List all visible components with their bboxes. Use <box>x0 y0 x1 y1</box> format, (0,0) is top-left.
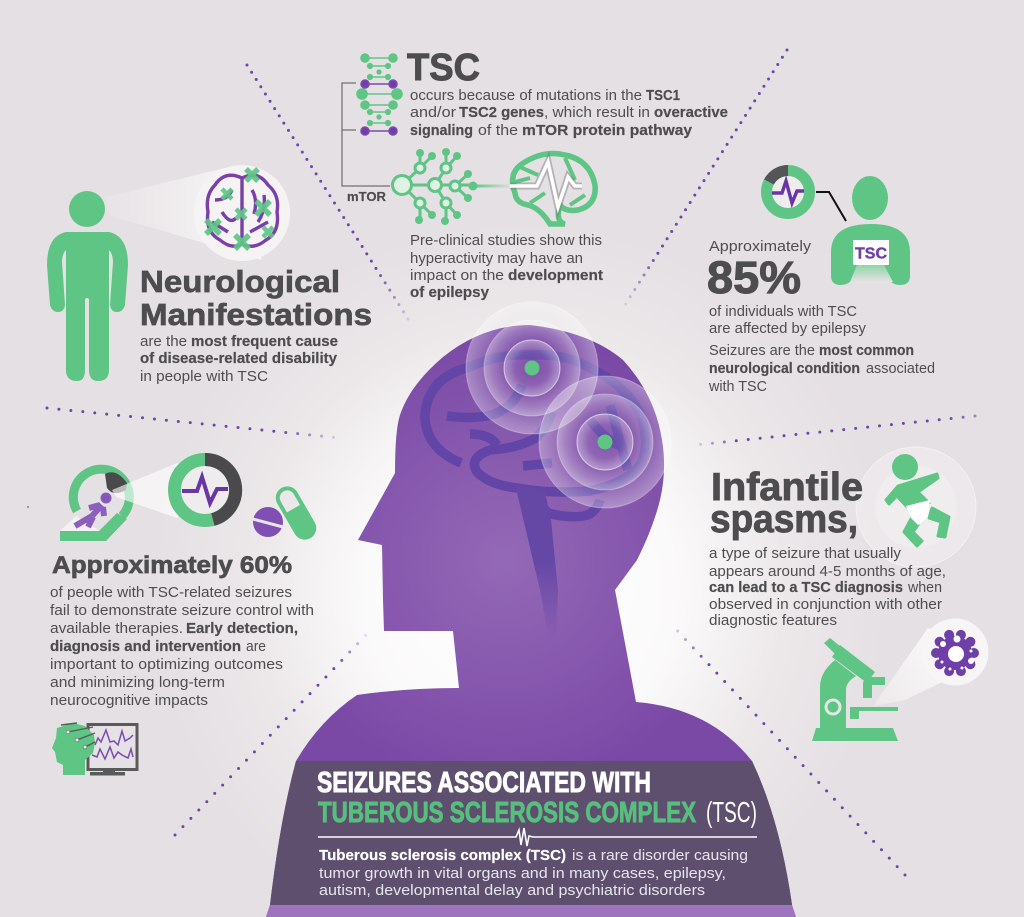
icon: EEG monitor and head <box>52 723 137 776</box>
banner title <box>317 767 757 829</box>
neurological text: are the <box>140 334 187 350</box>
neurological text: of disease-related disability <box>140 351 337 367</box>
neurological heading: Manifestations <box>140 297 372 332</box>
60% text: neurocognitive impacts <box>50 692 208 709</box>
icon: 85% donut with pulse <box>766 170 810 214</box>
icon: green brain with pulse <box>510 154 595 224</box>
banner description: autism, developmental delay and psychiatric disorders <box>319 883 705 899</box>
icon: mTOR pathway network <box>392 148 509 225</box>
icon: pill and capsule <box>253 482 320 544</box>
TSC description: signaling <box>410 123 473 139</box>
banner description <box>319 848 748 899</box>
central head silhouette with brain <box>266 302 796 917</box>
neurological text: most frequent cause <box>191 334 338 350</box>
pre-clinical text: Pre-clinical studies show this <box>410 233 602 249</box>
pre-clinical text: hyperactivity may have an <box>410 251 583 267</box>
mTOR label: mTOR <box>347 190 386 204</box>
85% text intro: Approximately <box>709 238 812 255</box>
icon: person <box>47 191 128 381</box>
TSC description <box>410 88 728 139</box>
panel: neurological manifestations <box>47 165 372 385</box>
infantile text: appears around 4-5 months of age, <box>709 564 946 580</box>
icon: brain with crosses <box>206 169 278 249</box>
icon: beam to brain <box>105 165 290 261</box>
TSC description: mTOR protein pathway <box>522 123 692 139</box>
banner: seizures associated with TSC <box>250 761 810 917</box>
panel: infantile spasms <box>709 447 988 741</box>
TSC description: TSC2 genes <box>459 105 544 121</box>
60% text: and minimizing long-term <box>50 674 225 691</box>
banner description: tumor growth in vital organs and in many cases, epilepsy, <box>319 866 726 882</box>
infantile text: observed in conjunction with other <box>709 597 942 613</box>
infantile heading: spasms, <box>710 498 858 541</box>
icon: MRI scanner <box>60 463 205 541</box>
infantile heading <box>710 466 863 541</box>
85% description: are affected by epilepsy <box>709 321 867 337</box>
infantile text: can lead to a TSC diagnosis <box>709 580 903 596</box>
85% figure: 85% <box>707 252 801 303</box>
bracket connector <box>342 83 390 186</box>
neurological text <box>140 334 338 385</box>
seizure ripples lower <box>539 376 671 508</box>
TSC description: occurs because of mutations in the <box>410 88 642 104</box>
panel: TSC genes and mTOR <box>342 47 728 301</box>
banner title: TUBEROUS SCLEROSIS COMPLEX <box>318 797 697 829</box>
60% text: are <box>246 638 266 655</box>
60% text: of people with TSC-related seizures <box>50 584 292 601</box>
85% description: associated <box>866 361 935 377</box>
icon: person with TSC sign: TSC <box>855 246 887 262</box>
banner description: is a rare disorder causing <box>572 848 748 864</box>
neurological heading: Neurological <box>140 264 340 299</box>
infantile text: a type of seizure that usually <box>709 546 902 562</box>
connector line <box>816 192 846 221</box>
panel: approximately 60% <box>50 459 320 776</box>
60% text: diagnosis and intervention <box>50 638 241 655</box>
85% description: most common <box>819 343 914 359</box>
infantile text: diagnostic features <box>709 613 837 629</box>
pre-clinical text <box>410 233 603 301</box>
85% description <box>708 304 935 395</box>
TSC description: and/or <box>410 105 456 121</box>
icon: 60% donut with pulse <box>174 459 236 520</box>
panel: 85% epilepsy <box>707 170 935 395</box>
pre-clinical text: impact on the <box>410 268 504 284</box>
60% text: important to optimizing outcomes <box>50 656 283 673</box>
60% heading: Approximately 60% <box>52 552 292 579</box>
85% description: Seizures are the <box>709 343 815 359</box>
60% text <box>50 584 314 709</box>
brain stem <box>515 484 558 640</box>
head and shoulders <box>266 325 796 917</box>
icon: microscope with cell <box>812 618 988 741</box>
banner rule with heartbeat <box>318 828 757 846</box>
TSC description: of the <box>478 123 518 139</box>
seizure ripples upper <box>466 302 598 434</box>
TSC heading: TSC <box>407 47 480 89</box>
banner description: Tuberous sclerosis complex (TSC) <box>319 848 566 864</box>
TSC description: , which result in <box>544 105 650 121</box>
85% description: neurological condition <box>709 361 860 377</box>
pre-clinical text: development <box>508 268 603 284</box>
85% description: of individuals with TSC <box>709 304 857 320</box>
neurological text: in people with TSC <box>140 369 268 385</box>
banner background <box>250 761 810 917</box>
60% text: available therapies. <box>50 620 183 637</box>
banner title: SEIZURES ASSOCIATED WITH <box>317 767 651 799</box>
TSC description: overactive <box>654 105 728 121</box>
TSC description: TSC1 <box>646 88 680 104</box>
icon: person with TSC sign <box>831 176 910 285</box>
infantile heading: Infantile <box>711 466 863 509</box>
60% text: fail to demonstrate seizure control with <box>50 602 314 619</box>
60% text: Early detection, <box>186 620 298 637</box>
infantile text <box>709 546 946 629</box>
icon: baby with motion rings <box>856 447 976 567</box>
banner title: (TSC) <box>706 797 757 829</box>
pre-clinical text: of epilepsy <box>410 285 489 301</box>
infantile text: when <box>907 580 942 596</box>
neurological heading <box>140 264 372 332</box>
icon: cell <box>931 630 979 676</box>
icon: patient <box>75 493 111 527</box>
85% description: with TSC <box>708 379 767 395</box>
brain outline <box>425 355 646 517</box>
icon: DNA strand <box>357 54 402 135</box>
